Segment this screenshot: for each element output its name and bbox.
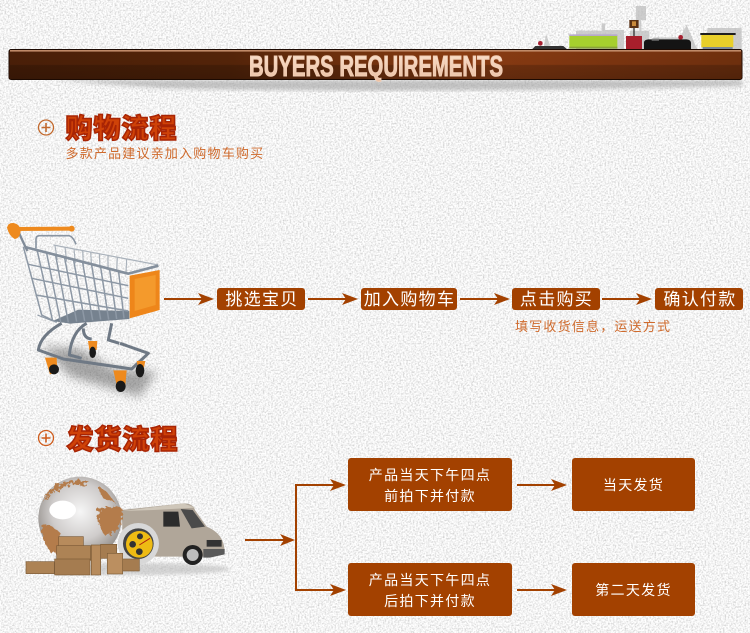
banner bar (9, 50, 742, 80)
van bumper (203, 549, 225, 558)
step: confirm payment: 确认付款 (663, 290, 737, 309)
banner highlight (10, 50, 741, 52)
icon: plus circle (38, 120, 54, 135)
step: add to cart: 加入购物车 (364, 290, 455, 309)
note: fill in info: 填写收货信息，运送方式 (515, 319, 671, 334)
box: after 4pm: 产品当天下午四点 (369, 572, 491, 588)
banner shadow (50, 80, 742, 91)
van roof (123, 503, 195, 511)
cart base tray (53, 310, 129, 324)
van headlight (207, 540, 222, 547)
icon: shopping cart (7, 223, 160, 397)
furniture illustrations on banner (532, 6, 742, 49)
cart handle (13, 223, 73, 235)
cart back wires (53, 245, 158, 274)
box: after 4pm: 后拍下并付款 (384, 593, 476, 609)
wheels (45, 341, 145, 392)
cart handle post (18, 232, 27, 251)
box: before 4pm: 前拍下并付款 (384, 488, 476, 504)
cart handle grip (7, 223, 21, 239)
globe continents (41, 480, 122, 555)
cart front wires (23, 247, 128, 322)
section heading: shopping process (38, 107, 264, 161)
step: click buy: 点击购买 (520, 290, 593, 309)
box: same-day shipping: 当天发货 (603, 477, 664, 493)
cardboard boxes (26, 537, 139, 575)
van window (163, 512, 180, 527)
arrow (517, 584, 567, 596)
cart upper rim (25, 247, 158, 274)
cart frame (38, 323, 148, 369)
box: before 4pm (348, 458, 512, 511)
box: next-day shipping (572, 563, 695, 616)
van body (122, 503, 225, 557)
arrow (602, 293, 652, 305)
cart handle end (69, 226, 75, 232)
arrow (460, 293, 510, 305)
globe highlight (49, 501, 76, 519)
ground shadow (37, 563, 230, 575)
arrow (308, 293, 358, 305)
arrow (517, 479, 567, 491)
banner title: BUYERS REQUIREMENTS (249, 51, 503, 83)
cart inner handle bracket (36, 236, 76, 248)
box: after 4pm (348, 563, 512, 616)
banner shading (10, 50, 741, 79)
icon: plus circle (38, 430, 54, 446)
illustration: globe, boxes and van (26, 477, 230, 575)
flow: shopping steps (164, 288, 743, 334)
heading text: 发货流程 (66, 418, 178, 457)
branch connector (296, 479, 346, 596)
heading text: 购物流程 (66, 107, 178, 146)
van windshield (181, 509, 205, 528)
header banner (9, 6, 742, 91)
cart orange panel (130, 270, 160, 318)
step: pick item: 挑选宝贝 (225, 290, 299, 309)
box: next-day shipping: 第二天发货 (595, 582, 672, 598)
section heading: delivery process (38, 418, 178, 457)
arrow (164, 293, 214, 305)
arrow into branch (245, 534, 295, 546)
box: same-day shipping (572, 458, 695, 511)
clock (118, 523, 159, 564)
subheading: 多款产品建议亲加入购物车购买 (66, 146, 264, 161)
box: before 4pm: 产品当天下午四点 (369, 467, 491, 483)
globe (38, 477, 122, 560)
cart panel inner (135, 275, 156, 311)
flow: delivery branches (245, 458, 695, 616)
cart shadow (42, 347, 157, 397)
van wheel (183, 545, 203, 565)
